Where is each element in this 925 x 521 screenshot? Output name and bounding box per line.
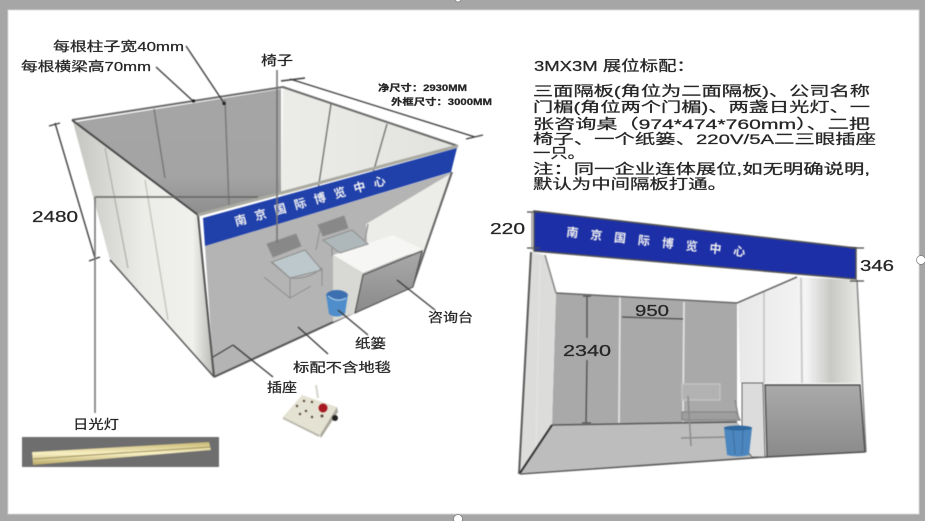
information desk <box>333 235 422 322</box>
panel seams <box>536 260 802 450</box>
description body: 椅子、一个纸篓、220V/5A二三眼插座 <box>533 131 876 147</box>
label: 220: 220 <box>490 221 525 238</box>
leader lines and dimension lines, left booth <box>49 46 483 413</box>
right description text <box>533 58 876 192</box>
description body: 注：同一企业连体展位,如无明确说明, <box>533 161 870 177</box>
right partition seen below the fascia <box>366 174 450 262</box>
selection handles <box>454 0 925 521</box>
description body: 张咨询桌（974*474*760mm）、二把 <box>533 116 870 132</box>
back wall interior <box>76 89 281 214</box>
icon: power socket <box>283 385 338 438</box>
label: fluorescent lamp: 日光灯 <box>73 417 119 432</box>
blue waste basket <box>724 426 752 456</box>
left wall exterior <box>73 122 214 377</box>
image: fluorescent tube <box>22 437 219 467</box>
blue company fascia: 南京国际博览中心 <box>233 173 387 229</box>
label: 2340: 2340 <box>563 343 612 360</box>
label: waste basket: 纸篓 <box>355 336 386 351</box>
label: chair: 椅子 <box>261 53 293 68</box>
label: outer size: 外框尺寸：3000MM <box>391 96 492 107</box>
left wall <box>520 252 556 473</box>
label: information desk: 咨询台 <box>428 310 473 325</box>
right booth labels <box>490 221 894 360</box>
left booth perspective drawing <box>72 87 458 377</box>
label: beam height: 每根横梁高70mm <box>21 59 151 74</box>
description heading: 3MX3M 展位标配： <box>534 58 695 75</box>
label: net size: 净尺寸：2930MM <box>378 82 467 93</box>
label: column width: 每根柱子宽40mm <box>53 39 184 54</box>
label: socket: 插座 <box>267 380 297 395</box>
left booth labels <box>21 39 492 432</box>
label: 346: 346 <box>860 258 894 275</box>
description body: 一只。 <box>533 145 585 161</box>
right wall <box>738 277 862 383</box>
label: 2480: 2480 <box>32 209 78 226</box>
description body <box>533 83 876 192</box>
chairs <box>264 216 368 298</box>
blue company fascia: 南京国际博览中心 <box>566 224 746 259</box>
blue company fascia <box>203 148 457 246</box>
right wall interior <box>281 88 455 196</box>
description body: 门楣(角位两个门楣)、两盏日光灯、一 <box>533 99 870 115</box>
label: 950: 950 <box>635 303 669 320</box>
information desk front <box>742 383 865 457</box>
chair front view <box>681 384 740 446</box>
description body: 默认为中间隔板打通。 <box>533 176 727 192</box>
booth top frame <box>72 87 458 377</box>
blue waste basket <box>326 290 348 316</box>
back wall <box>552 293 737 425</box>
booth floor and front opening <box>205 172 452 377</box>
right booth dimension lines <box>527 212 864 423</box>
booth outline <box>519 252 866 474</box>
label: carpet not included: 标配不含地毯 <box>293 360 391 375</box>
description body: 三面隔板(角位为二面隔板)、公司名称 <box>533 83 870 99</box>
wall panel seams <box>105 100 387 320</box>
floor <box>520 422 767 473</box>
right booth front view <box>519 211 866 474</box>
blue company fascia <box>534 211 856 279</box>
